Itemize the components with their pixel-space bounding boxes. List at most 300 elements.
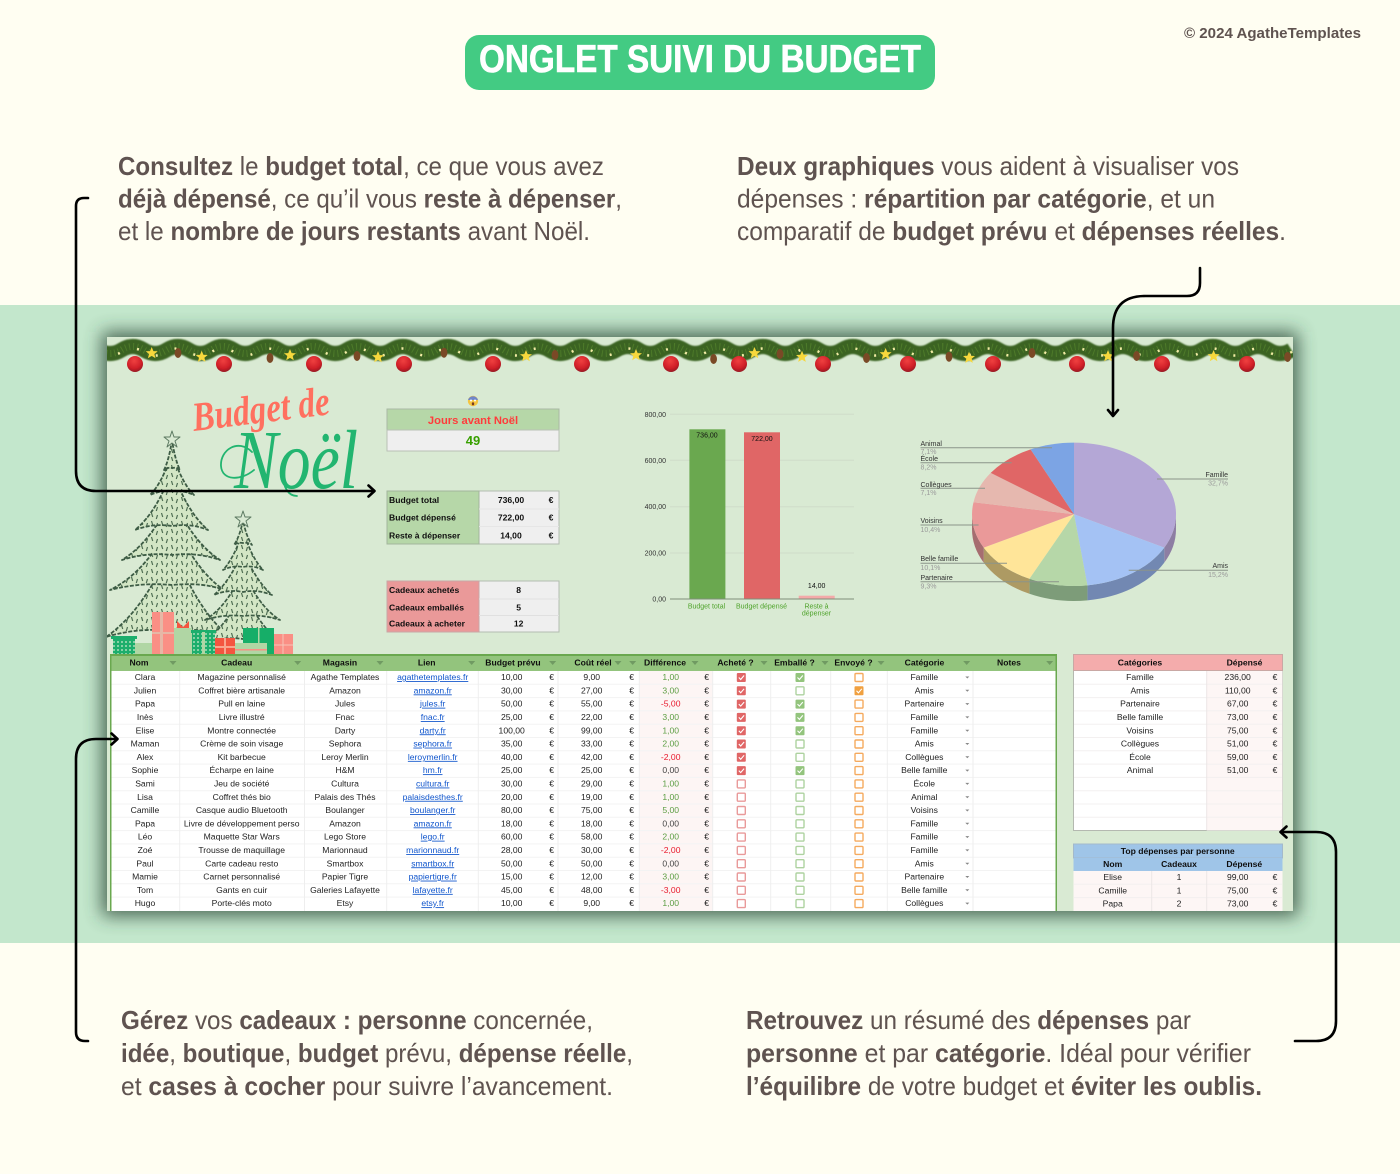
table: top spending per person: €: [1273, 885, 1278, 895]
column: différence: 1,00: [662, 792, 679, 802]
column: euro signs: €: [629, 845, 634, 855]
title pill: [465, 35, 935, 90]
card: gift counters: [387, 581, 559, 632]
column: coût réel: 25,00: [581, 765, 603, 775]
column: euro signs: €: [704, 858, 709, 868]
text block: top right: comparatif de budget prévu et dépenses réelles.: [737, 216, 1286, 246]
column: coût réel: 58,00: [581, 832, 603, 842]
column: coût réel: 9,00: [583, 898, 600, 908]
card: budget totals: 722,00: [498, 513, 524, 523]
column: cadeau: Porte-clés moto: [212, 898, 272, 908]
column: cadeau: Carnet personnalisé: [203, 872, 280, 882]
illustration: big fir tree: [106, 431, 230, 637]
column: catégorie: Amis: [915, 739, 934, 749]
column: catégorie: Belle famille: [901, 765, 948, 775]
column: lien: agathetemplates.fr: [397, 672, 468, 682]
column: catégorie: Voisins: [911, 805, 938, 815]
bar chart: Budget dépensé: [736, 604, 787, 610]
column: euro signs: €: [704, 792, 709, 802]
column: nom: Papa: [135, 699, 155, 709]
column: acheté checkboxes: [737, 673, 746, 908]
column: budget prévu: 30,00: [501, 685, 523, 695]
column: euro signs: €: [629, 672, 634, 682]
column: euro signs: €: [549, 699, 554, 709]
column: catégorie: Famille: [910, 845, 938, 855]
card: jours avant Noël: 49: [466, 433, 480, 448]
garland: [99, 346, 1314, 372]
column: cadeau: Écharpe en laine: [209, 765, 274, 775]
column: euro signs: €: [629, 898, 634, 908]
column: euro signs: €: [549, 872, 554, 882]
table header: Budget prévu: [485, 658, 541, 668]
column: magasin: Agathe Templates: [311, 672, 379, 682]
column: nom: Maman: [131, 739, 160, 749]
screenshot shadow: [102, 332, 1298, 916]
table: top spending per person: Cadeaux: [1161, 859, 1197, 869]
arrow: table callout: [76, 734, 118, 1041]
table: top spending per person: Top dépenses par personne: [1121, 846, 1235, 856]
column: euro signs: €: [549, 832, 554, 842]
category names: Amis: [1130, 685, 1150, 695]
column: cadeau: Gants en cuir: [216, 885, 267, 895]
table: spending by category: Dépensé: [1227, 658, 1263, 668]
column: euro signs: €: [704, 725, 709, 735]
logo title: Budget de Noël: [194, 388, 356, 497]
table header: Emballé ?: [774, 658, 815, 668]
column: euro signs: €: [704, 898, 709, 908]
column: catégorie: Partenaire: [904, 699, 944, 709]
table: top spending per person: 1: [1177, 872, 1182, 882]
bar chart: 14,00: [808, 583, 826, 590]
column: budget prévu: 45,00: [501, 885, 523, 895]
pie: category labels: Animal: [920, 441, 942, 448]
column: euro signs: €: [549, 725, 554, 735]
column: catégorie: [901, 672, 969, 908]
column: euro signs: €: [549, 845, 554, 855]
column: nom: Tom: [137, 885, 153, 895]
table header: Notes: [997, 658, 1021, 668]
column: lien: hm.fr: [423, 765, 443, 775]
table: spending by category: Catégories: [1118, 658, 1162, 668]
column: euro signs: €: [704, 685, 709, 695]
column: emballé checkboxes: [796, 673, 804, 908]
column: euro signs: €: [704, 872, 709, 882]
category amounts: 51,00: [1227, 765, 1249, 775]
column: nom: Léo: [138, 832, 152, 842]
column: euro signs: €: [549, 818, 554, 828]
column: budget prévu: 10,00: [501, 672, 523, 682]
column: magasin: Palais des Thés: [314, 792, 376, 802]
text block: bottom left: et cases à cocher pour suivre l’avancement.: [121, 1071, 613, 1101]
column: nom: Hugo: [135, 898, 155, 908]
card: budget totals: [387, 491, 559, 544]
column: cadeau: Coffret thés bio: [213, 792, 271, 802]
column: cadeau: Casque audio Bluetooth: [196, 805, 288, 815]
category amounts: €: [1273, 752, 1278, 762]
text block: bottom right: Retrouvez un résumé des dépenses par: [746, 1005, 1191, 1035]
column: différence: 3,00: [662, 872, 679, 882]
text block: bottom right: [746, 1005, 1262, 1101]
column: lien: lego.fr: [421, 832, 445, 842]
pie: category labels: Famille: [1205, 472, 1228, 479]
column: euro signs: €: [549, 739, 554, 749]
bar chart: 200,00: [645, 550, 666, 558]
column: différence: 0,00: [662, 818, 679, 828]
card: budget totals: 14,00: [500, 530, 522, 540]
table: top spending per person: [1074, 844, 1282, 911]
pie: percentages: 15,2%: [1208, 572, 1228, 579]
text block: top left: déjà dépensé, ce qu’il vous reste à dépenser,: [118, 184, 622, 214]
text block: top left: [118, 151, 622, 246]
column: lien: amazon.fr: [414, 685, 452, 695]
column: lien: etsy.fr: [421, 898, 444, 908]
column: euro signs: €: [549, 672, 554, 682]
column: magasin: Boulanger: [325, 805, 365, 815]
category names: [1117, 672, 1163, 775]
column: coût réel: 75,00: [581, 805, 603, 815]
text block: bottom left: idée, boutique, budget prévu, dépense réelle,: [121, 1038, 633, 1068]
logo title: Budget de Noël: Budget de: [189, 377, 332, 440]
pie: percentages: 7,1%: [920, 449, 936, 456]
card: budget totals: 736,00: [498, 495, 524, 505]
table: top spending per person: 73,00: [1227, 898, 1249, 908]
column: cadeau: Trousse de maquillage: [198, 845, 285, 855]
column: lien: boulanger.fr: [410, 805, 456, 815]
column: coût réel: 27,00: [581, 685, 603, 695]
column: euro signs: €: [549, 778, 554, 788]
column: nom: Clara: [135, 672, 155, 682]
column: coût réel: 99,00: [581, 725, 603, 735]
column: cadeau: Jeu de société: [214, 778, 270, 788]
column: cadeau: Crème de soin visage: [200, 739, 283, 749]
column: euro signs: €: [549, 712, 554, 722]
column: coût réel: 29,00: [581, 778, 603, 788]
table: top spending per person: Elise: [1103, 872, 1122, 882]
column: magasin: Sephora: [329, 739, 361, 749]
column: lien: leroymerlin.fr: [408, 752, 458, 762]
column: euro signs: €: [549, 805, 554, 815]
column: nom: [131, 672, 160, 908]
card: gift counters: Cadeaux à acheter: [389, 619, 466, 629]
column: budget prévu: 15,00: [501, 872, 523, 882]
column: différence: 2,00: [662, 739, 679, 749]
column: coût réel: [581, 672, 603, 908]
category amounts: €: [1273, 712, 1278, 722]
column: magasin: Amazon: [329, 685, 361, 695]
column: euro signs: €: [549, 685, 554, 695]
table: top spending per person: €: [1273, 898, 1278, 908]
category names: Belle famille: [1117, 712, 1163, 722]
bar chart: [645, 412, 854, 618]
column: cadeau: Carte cadeau resto: [205, 858, 278, 868]
column: magasin: Amazon: [329, 818, 361, 828]
column: budget prévu: 10,00: [501, 898, 523, 908]
column: différence: [661, 672, 681, 908]
column: budget prévu: 40,00: [501, 752, 523, 762]
column: catégorie: Partenaire: [904, 872, 944, 882]
column: euro signs: €: [629, 885, 634, 895]
category names: École: [1129, 752, 1151, 762]
column: nom: Sami: [135, 778, 155, 788]
column: magasin: Lego Store: [324, 832, 366, 842]
column: euro signs: €: [629, 778, 634, 788]
category amounts: 236,00: [1225, 672, 1251, 682]
pie: percentages: 8,2%: [920, 464, 936, 472]
column: euro signs: €: [704, 712, 709, 722]
column: magasin: Papier Tigre: [322, 872, 368, 882]
pie: category labels: Collègues: [920, 482, 952, 489]
table: top spending per person: Papa: [1103, 898, 1123, 908]
category amounts: 59,00: [1227, 752, 1249, 762]
column: lien: papiertigre.fr: [409, 872, 457, 882]
column: catégorie: Animal: [911, 792, 938, 802]
column: coût réel: 12,00: [581, 872, 603, 882]
column: budget prévu: 25,00: [501, 765, 523, 775]
column: lien: [397, 672, 468, 908]
pie: category labels: Belle famille: [920, 556, 958, 563]
column: différence: 1,00: [662, 778, 679, 788]
column: catégorie: Belle famille: [901, 885, 948, 895]
column: euro signs: €: [629, 872, 634, 882]
card: jours avant Noël: [387, 396, 559, 451]
table header: Acheté ?: [717, 658, 754, 668]
pie: category labels: Amis: [1212, 563, 1228, 570]
column: magasin: H&M: [335, 765, 355, 775]
pie: percentages: 9,3%: [920, 584, 936, 590]
bar chart: 600,00: [645, 458, 666, 465]
bar chart: 0,00: [652, 596, 666, 604]
column: envoyé checkboxes: [854, 674, 864, 908]
category amounts: 75,00: [1227, 725, 1249, 735]
column: coût réel: 48,00: [581, 885, 603, 895]
column: différence: 1,00: [662, 725, 679, 735]
column: cadeau: Pull en laine: [218, 699, 265, 709]
column: nom: Lisa: [137, 792, 153, 802]
column: euro signs: €: [629, 805, 634, 815]
table header: Cadeau: [221, 658, 252, 668]
column: catégorie: Famille: [910, 712, 938, 722]
column: euro signs: €: [629, 739, 634, 749]
pie: percentages: 10,1%: [920, 565, 940, 572]
text block: bottom right: personne et par catégorie. Idéal pour vérifier: [746, 1038, 1251, 1068]
category names: Collègues: [1121, 739, 1159, 749]
column: différence: -3,00: [661, 885, 681, 895]
bar chart: Reste à: [804, 604, 829, 610]
column: catégorie: Collègues: [905, 752, 943, 762]
column: catégorie: École: [914, 778, 935, 788]
category amounts: €: [1273, 672, 1278, 682]
bar chart: 800,00: [645, 412, 666, 419]
table: top spending per person: €: [1273, 872, 1278, 882]
column: différence: 1,00: [662, 898, 679, 908]
column: différence: -5,00: [661, 699, 681, 709]
column: catégorie: Amis: [915, 858, 934, 868]
column: catégorie: Famille: [910, 818, 938, 828]
pie: category labels: Voisins: [920, 518, 943, 525]
column: différence: 5,00: [662, 805, 679, 815]
category names: Famille: [1126, 672, 1154, 682]
card: budget totals: €: [549, 495, 554, 505]
column: lien: sephora.fr: [413, 739, 452, 749]
column: magasin: Leroy Merlin: [321, 752, 369, 762]
column: magasin: Galeries Lafayette: [310, 885, 380, 895]
table: top spending per person: 99,00: [1227, 872, 1249, 882]
table: top spending per person: 2: [1177, 898, 1182, 908]
column: euro signs: €: [704, 845, 709, 855]
column: cadeau: Kit barbecue: [218, 752, 266, 762]
table: top spending per person: 75,00: [1227, 885, 1249, 895]
bar chart: dépenser: [802, 610, 832, 618]
column: différence: 0,00: [662, 858, 679, 868]
column: catégorie: Famille: [910, 725, 938, 735]
category amounts: 73,00: [1227, 712, 1249, 722]
text block: bottom left: Gérez vos cadeaux : personne concernée,: [121, 1005, 593, 1035]
column: budget prévu: 18,00: [501, 818, 523, 828]
column: catégorie: Famille: [910, 672, 938, 682]
column: budget prévu: 30,00: [501, 778, 523, 788]
column: euro signs: €: [629, 712, 634, 722]
category amounts: €: [1273, 699, 1278, 709]
column: euro signs: €: [549, 898, 554, 908]
column: cadeau: Montre connectée: [207, 725, 276, 735]
column: lien: darty.fr: [420, 725, 446, 735]
card: budget totals: €: [549, 513, 554, 523]
bar chart: 400,00: [645, 504, 666, 511]
logo title: Budget de Noël: Noël: [233, 414, 358, 507]
column: euro signs: €: [704, 699, 709, 709]
column: cadeau: Maquette Star Wars: [204, 832, 280, 842]
column: catégorie: Collègues: [905, 898, 943, 908]
column: magasin: Smartbox: [327, 858, 364, 868]
table header: Nom: [129, 658, 149, 668]
column: cadeau: Livre illustré: [219, 712, 265, 722]
column: coût réel: 55,00: [581, 699, 603, 709]
card: jours avant Noël: Jours avant Noël: [428, 415, 518, 427]
column: budget prévu: [499, 672, 525, 908]
text block: top right: Deux graphiques vous aident à visualiser vos: [737, 151, 1239, 181]
card: budget totals: Budget dépensé: [389, 513, 456, 523]
column: budget prévu: 50,00: [501, 858, 523, 868]
category amounts: 110,00: [1225, 685, 1251, 695]
table header: Différence: [644, 658, 686, 668]
text block: top right: [737, 151, 1286, 246]
bar chart: Budget total: [688, 604, 726, 610]
table: top spending per person: Camille: [1098, 885, 1127, 895]
category amounts: [1225, 672, 1278, 775]
column: budget prévu: 60,00: [501, 832, 523, 842]
column: lien: fnac.fr: [421, 712, 445, 722]
column: euro signs: €: [704, 739, 709, 749]
green band: [0, 305, 1400, 943]
pie: percentages: [920, 449, 1228, 590]
column: euro signs: €: [549, 885, 554, 895]
column: cadeau: [184, 672, 300, 908]
column: lien: marionnaud.fr: [406, 845, 459, 855]
column: budget prévu: 35,00: [501, 739, 523, 749]
column: nom: Julien: [134, 685, 156, 695]
column: différence: 0,00: [662, 765, 679, 775]
column: différence: 1,00: [662, 672, 679, 682]
column: différence: -2,00: [661, 752, 681, 762]
column: euro signs: €: [704, 818, 709, 828]
column: magasin: [310, 672, 380, 908]
column: euro signs: €: [629, 818, 634, 828]
pie: slices: [972, 443, 1176, 586]
category names: Partenaire: [1120, 699, 1160, 709]
card: budget totals: Budget total: [389, 495, 439, 505]
arrow: totals callout: [76, 198, 374, 496]
table header: Coût réel: [574, 658, 612, 668]
column: cadeau: Coffret bière artisanale: [198, 685, 285, 695]
table header: [130, 660, 1053, 667]
category amounts: €: [1273, 739, 1278, 749]
copyright: © 2024 AgatheTemplates: [1184, 26, 1361, 42]
category amounts: €: [1273, 725, 1278, 735]
column: euro signs: €: [629, 832, 634, 842]
card: gift counters: 8: [516, 585, 521, 595]
column: lien: jules.fr: [419, 699, 445, 709]
column: euro signs: [549, 672, 709, 908]
column: budget prévu: 50,00: [501, 699, 523, 709]
table: spending by category: [1074, 654, 1282, 830]
table header: Lien: [418, 658, 436, 668]
bar chart: 736,00: [696, 432, 718, 440]
column: budget prévu: 25,00: [501, 712, 523, 722]
column: magasin: Etsy: [337, 898, 354, 908]
bar chart: 722,00: [751, 436, 773, 443]
text block: top right: dépenses : répartition par catégorie, et un: [737, 184, 1215, 214]
illustration: gift boxes: [111, 612, 293, 656]
column: nom: Papa: [135, 818, 155, 828]
pie: category labels: Partenaire: [920, 575, 953, 582]
pie: percentages: 7,1%: [920, 490, 936, 497]
text block: bottom left: [121, 1005, 633, 1101]
column: lien: cultura.fr: [416, 778, 450, 788]
column: nom: Camille: [131, 805, 160, 815]
column: catégorie: Famille: [910, 832, 938, 842]
column: magasin: Darty: [335, 725, 356, 735]
column: euro signs: €: [629, 725, 634, 735]
column: euro signs: €: [629, 792, 634, 802]
column: coût réel: 30,00: [581, 845, 603, 855]
column: euro signs: €: [549, 792, 554, 802]
column: cadeau: Livre de développement perso: [184, 818, 300, 828]
column: différence: -2,00: [661, 845, 681, 855]
table header: Catégorie: [905, 658, 945, 668]
column: coût réel: 19,00: [581, 792, 603, 802]
column: euro signs: €: [629, 765, 634, 775]
column: budget prévu: 20,00: [501, 792, 523, 802]
category names: Voisins: [1126, 725, 1154, 735]
column: euro signs: €: [629, 699, 634, 709]
column: coût réel: 22,00: [581, 712, 603, 722]
column: lien: smartbox.fr: [411, 858, 454, 868]
column: différence: 3,00: [662, 685, 679, 695]
column: euro signs: €: [704, 778, 709, 788]
column: euro signs: €: [704, 832, 709, 842]
panel: spreadsheet screenshot: [99, 337, 1314, 911]
category amounts: 51,00: [1227, 739, 1249, 749]
arrow: summary callout: [1280, 826, 1336, 1041]
column: nom: Inès: [137, 712, 153, 722]
column: coût réel: 50,00: [581, 858, 603, 868]
column: différence: 3,00: [662, 712, 679, 722]
column: différence: 2,00: [662, 832, 679, 842]
title pill: ONGLET SUIVI DU BUDGET: [479, 38, 921, 81]
text block: top left: et le nombre de jours restants avant Noël.: [118, 216, 590, 246]
column: euro signs: €: [704, 752, 709, 762]
column: budget prévu: 80,00: [501, 805, 523, 815]
